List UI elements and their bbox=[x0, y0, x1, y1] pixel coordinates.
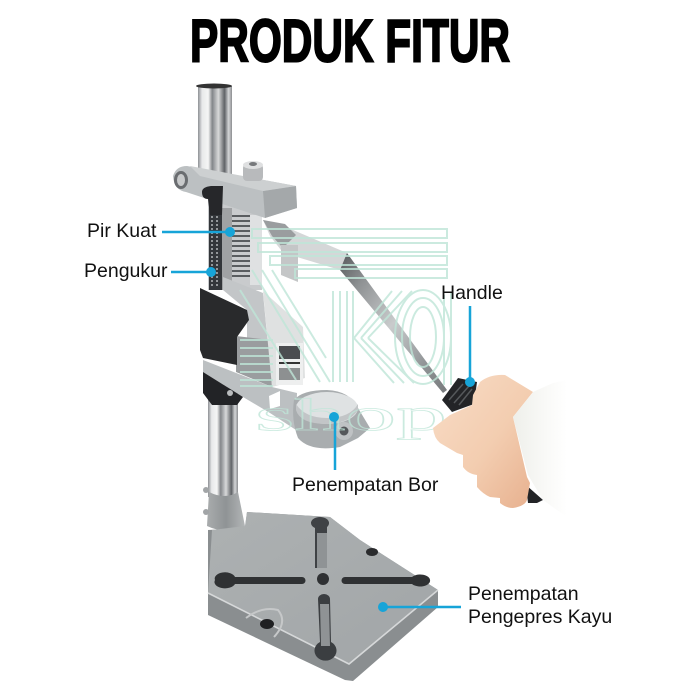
carriage body bbox=[223, 277, 305, 387]
base plate bbox=[208, 512, 438, 681]
head block bbox=[173, 161, 297, 218]
rack and spring bbox=[208, 200, 262, 290]
drill holder ring bbox=[293, 390, 370, 448]
hand bbox=[433, 375, 533, 508]
black side plate bbox=[200, 288, 249, 365]
callout: Handle: Handle bbox=[441, 282, 503, 304]
callout: Penempatan Pengepres Kayu: Penempatan bbox=[468, 583, 579, 605]
callout: Pir Kuat bbox=[87, 220, 235, 242]
hand holding handle bbox=[433, 375, 567, 517]
lower column bbox=[208, 385, 238, 497]
base collar bbox=[203, 487, 245, 530]
base slot: left bbox=[214, 572, 306, 588]
base mounting holes bbox=[260, 619, 274, 629]
title: PRODUK FITUR bbox=[190, 8, 510, 74]
callout: Pengukur bbox=[84, 260, 216, 282]
base slot: right bbox=[342, 575, 430, 586]
handle grip bbox=[442, 378, 543, 503]
base slot: bottom bbox=[314, 594, 337, 661]
callout: Penempatan Bor bbox=[292, 412, 439, 496]
upper column bbox=[196, 84, 232, 186]
callout: Handle bbox=[441, 282, 503, 387]
watermark word: shop bbox=[255, 389, 447, 440]
sleeve bbox=[513, 380, 567, 517]
callout: Penempatan Pengepres Kayu bbox=[378, 583, 612, 628]
clamp arm bbox=[203, 360, 297, 430]
callout: Pir Kuat: Pir Kuat bbox=[87, 220, 157, 242]
callout: Penempatan Bor: Penempatan Bor bbox=[292, 474, 439, 496]
watermark: RKQ shop bbox=[240, 229, 451, 440]
base slot: top bbox=[311, 517, 329, 568]
callout: Pengukur: Pengukur bbox=[84, 260, 168, 282]
drill press stand bbox=[173, 84, 447, 681]
lever arm bbox=[263, 220, 447, 393]
callout: Penempatan Pengepres Kayu: Pengepres Kayu bbox=[468, 606, 612, 628]
base center hole bbox=[317, 573, 329, 585]
